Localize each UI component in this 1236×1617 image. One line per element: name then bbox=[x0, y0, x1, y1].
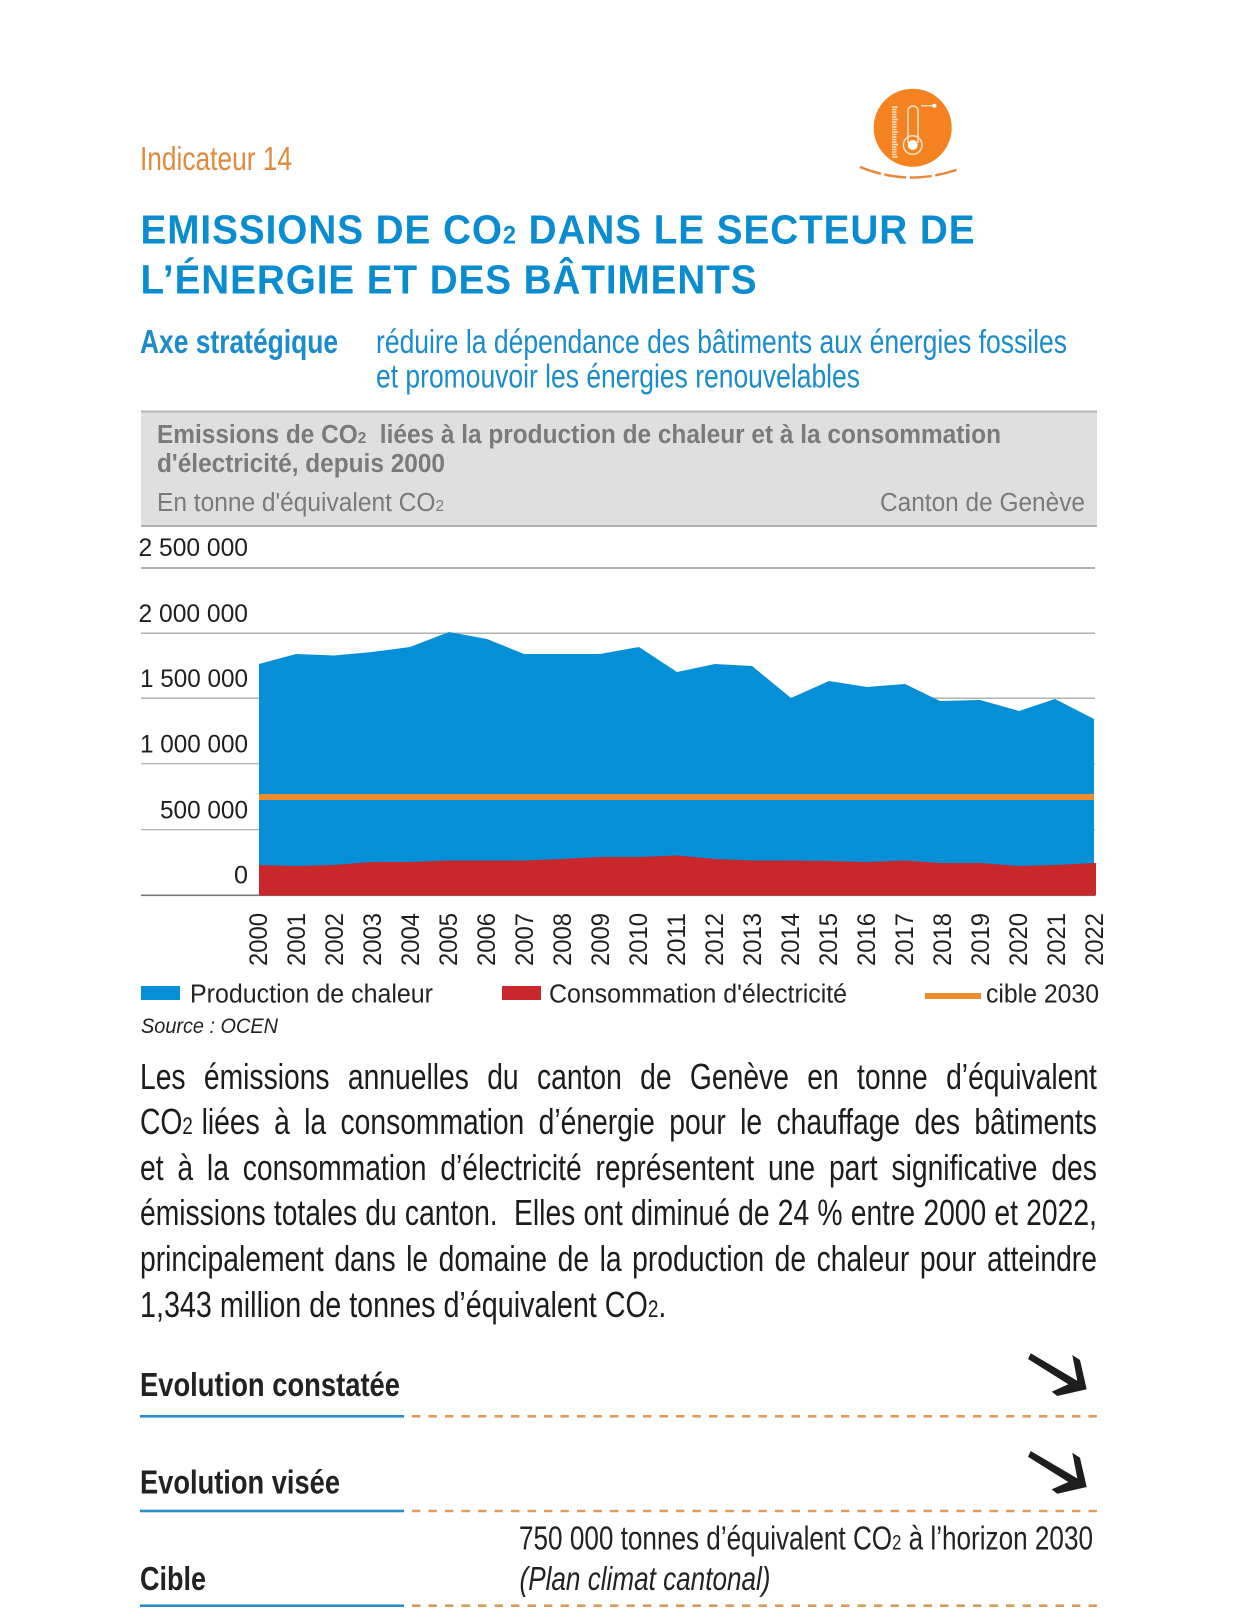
body text paragraph: principalement dans le domaine de la production de chaleur pour atteindre bbox=[140, 1238, 1097, 1279]
row: cible: 750 000 tonnes d’équivalent CO2 à l’horizon 2030 bbox=[519, 1520, 1093, 1557]
x-axis year labels: 2009 bbox=[587, 913, 615, 966]
x-axis year labels: 2016 bbox=[853, 913, 881, 966]
area chart bbox=[141, 567, 1096, 896]
x-axis year labels: 2020 bbox=[1005, 913, 1033, 966]
x-axis year labels: 2002 bbox=[321, 913, 349, 966]
legend: Production de chaleur bbox=[190, 980, 433, 1008]
legend: cible 2030 bbox=[986, 980, 1099, 1008]
strategic axis: et promouvoir les énergies renouvelables bbox=[376, 358, 860, 394]
x-axis year labels: 2015 bbox=[815, 913, 843, 966]
y-axis labels: 2 500 000 bbox=[138, 534, 248, 562]
strategic axis: Axe stratégique bbox=[140, 323, 338, 360]
series: consommation d'électricité bbox=[259, 856, 1096, 896]
title: EMISSIONS DE CO2 DANS LE SECTEUR DE bbox=[140, 206, 976, 252]
x-axis year labels: 2003 bbox=[359, 913, 387, 966]
x-axis year labels: 2011 bbox=[663, 913, 691, 966]
body text paragraph: 1,343 million de tonnes d’équivalent CO2. bbox=[140, 1284, 666, 1325]
strategic axis: réduire la dépendance des bâtiments aux énergies fossiles bbox=[376, 323, 1067, 360]
x-axis year labels: 2012 bbox=[701, 913, 729, 966]
legend bbox=[141, 980, 1099, 1008]
strategic axis bbox=[140, 323, 1067, 394]
body text paragraph: Les émissions annuelles du canton de Genève en tonne d’équivalent bbox=[140, 1056, 1097, 1096]
row: evolution visée bbox=[140, 1451, 1097, 1512]
x-axis year labels: 2019 bbox=[967, 913, 995, 966]
target line 2030 bbox=[259, 794, 1094, 800]
source note: Source : OCEN bbox=[141, 1015, 279, 1038]
x-axis year labels: 2017 bbox=[891, 913, 919, 966]
arrow: decreasing trend bbox=[1028, 1353, 1087, 1396]
y-axis labels: 0 bbox=[234, 861, 248, 889]
x-axis year labels: 2008 bbox=[549, 913, 577, 966]
row: evolution constatée bbox=[140, 1353, 1097, 1418]
legend: Consommation d'électricité bbox=[549, 980, 847, 1008]
y-axis labels: 1 000 000 bbox=[140, 731, 248, 759]
row: evolution constatée: Evolution constatée bbox=[140, 1366, 400, 1403]
icon: thermometer in orange circle bbox=[860, 89, 959, 178]
panel: chart header: Canton de Genève bbox=[880, 489, 1085, 517]
x-axis year labels bbox=[245, 913, 1109, 966]
row: evolution visée: Evolution visée bbox=[140, 1463, 340, 1500]
x-axis year labels: 2004 bbox=[397, 913, 425, 966]
arrow: target trend bbox=[1028, 1451, 1087, 1494]
y-axis labels: 1 500 000 bbox=[140, 665, 248, 693]
indicator label: Indicateur 14 bbox=[140, 140, 292, 177]
y-axis labels: 500 000 bbox=[160, 796, 248, 824]
series: production de chaleur bbox=[259, 632, 1094, 870]
y-axis labels: 2 000 000 bbox=[138, 600, 248, 628]
x-axis year labels: 2005 bbox=[435, 913, 463, 966]
title: L’ÉNERGIE ET DES BÂTIMENTS bbox=[140, 256, 758, 302]
x-axis year labels: 2000 bbox=[245, 913, 273, 966]
body text paragraph: émissions totales du canton. Elles ont diminué de 24 % entre 2000 et 2022, bbox=[140, 1192, 1097, 1233]
body text paragraph bbox=[140, 1056, 1097, 1325]
panel: chart header: Emissions de CO2 liées à la production de chaleur et à la consommation bbox=[157, 421, 1001, 449]
x-axis year labels: 2007 bbox=[511, 913, 539, 966]
x-axis year labels: 2010 bbox=[625, 913, 653, 966]
panel: chart header: d'électricité, depuis 2000 bbox=[157, 450, 445, 478]
row: cible bbox=[140, 1520, 1097, 1607]
x-axis year labels: 2021 bbox=[1043, 913, 1071, 966]
y-axis labels bbox=[138, 534, 248, 889]
panel: chart header bbox=[141, 410, 1097, 527]
x-axis year labels: 2022 bbox=[1081, 913, 1109, 966]
body text paragraph: et à la consommation d’électricité représentent une part significative des bbox=[140, 1147, 1097, 1188]
row: cible: Cible bbox=[140, 1560, 206, 1597]
body text paragraph: CO2 liées à la consommation d’énergie pour le chauffage des bâtiments bbox=[140, 1101, 1097, 1142]
x-axis year labels: 2014 bbox=[777, 913, 805, 966]
panel: chart header: En tonne d'équivalent CO2 bbox=[157, 489, 444, 517]
title bbox=[140, 206, 976, 302]
x-axis year labels: 2013 bbox=[739, 913, 767, 966]
x-axis year labels: 2001 bbox=[283, 913, 311, 966]
row: cible: (Plan climat cantonal) bbox=[520, 1560, 770, 1597]
x-axis year labels: 2006 bbox=[473, 913, 501, 966]
x-axis year labels: 2018 bbox=[929, 913, 957, 966]
